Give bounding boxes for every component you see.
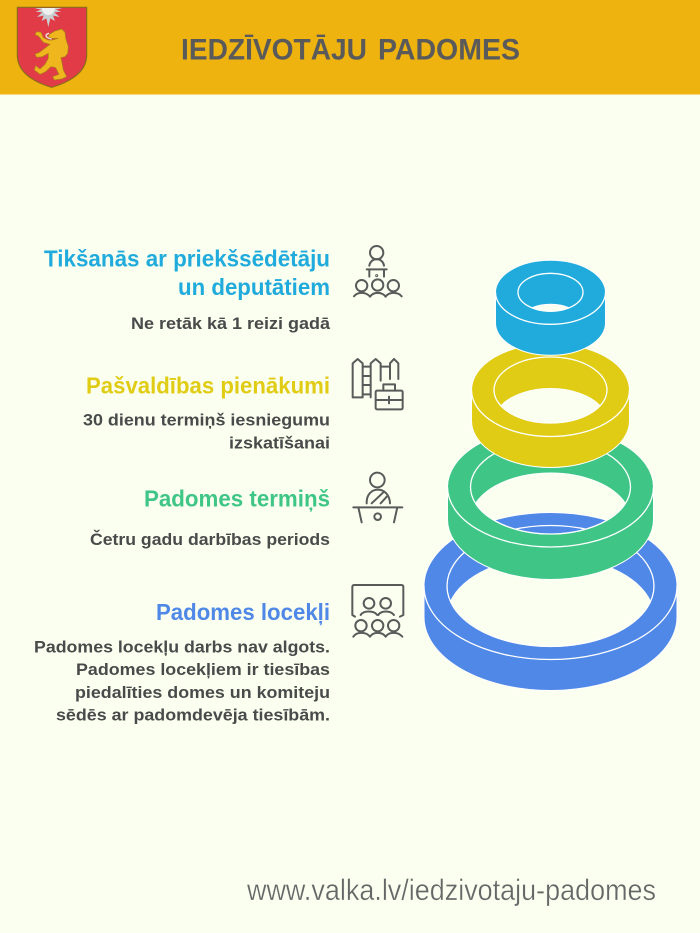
heading: meetings [44, 246, 330, 300]
ring: yellow [472, 343, 630, 468]
text: members: Padomes locekļu darbs nav algots. [34, 638, 330, 656]
text: duties: izskatīšanai [229, 434, 330, 452]
heading: duties: Pašvaldības pienākumi [86, 372, 330, 398]
header band [0, 0, 700, 94]
text: duties: 30 dienu termiņš iesniegumu [83, 410, 330, 430]
title: IEDZĪVOTĀJU [181, 34, 367, 66]
heading: term: Padomes termiņš [144, 486, 330, 512]
heading: meetings: un deputātiem [178, 274, 330, 300]
ring: green [448, 427, 654, 580]
block: term [90, 486, 330, 549]
text: meetings: Ne retāk kā 1 reizi gadā [131, 314, 331, 333]
title [181, 34, 520, 66]
text: duties [83, 410, 330, 452]
text: term: Četru gadu darbības periods [90, 530, 330, 549]
icon: fence and briefcase [353, 359, 403, 409]
text: members [34, 638, 330, 724]
block: meetings [44, 246, 331, 333]
block: members [34, 599, 330, 724]
icon: person at lectern [353, 473, 402, 522]
title: PADOMES [378, 34, 520, 66]
ring: blue [424, 512, 677, 690]
text: members: Padomes locekļiem ir tiesības [76, 660, 330, 679]
block: duties [83, 372, 330, 452]
text: members: sēdēs ar padomdevēja tiesībām. [56, 706, 330, 724]
icon: coat of arms [17, 7, 87, 87]
icon: speaker and audience [354, 246, 402, 297]
icon: members in a frame [352, 585, 403, 637]
heading: meetings: Tikšanās ar priekšsēdētāju [44, 246, 330, 272]
footer url: www.valka.lv/iedzivotaju-padomes [246, 874, 656, 907]
ring: cyan [496, 260, 606, 355]
heading: members: Padomes locekļi [156, 599, 330, 625]
text: members: piedalīties domes un komiteju [75, 683, 330, 702]
